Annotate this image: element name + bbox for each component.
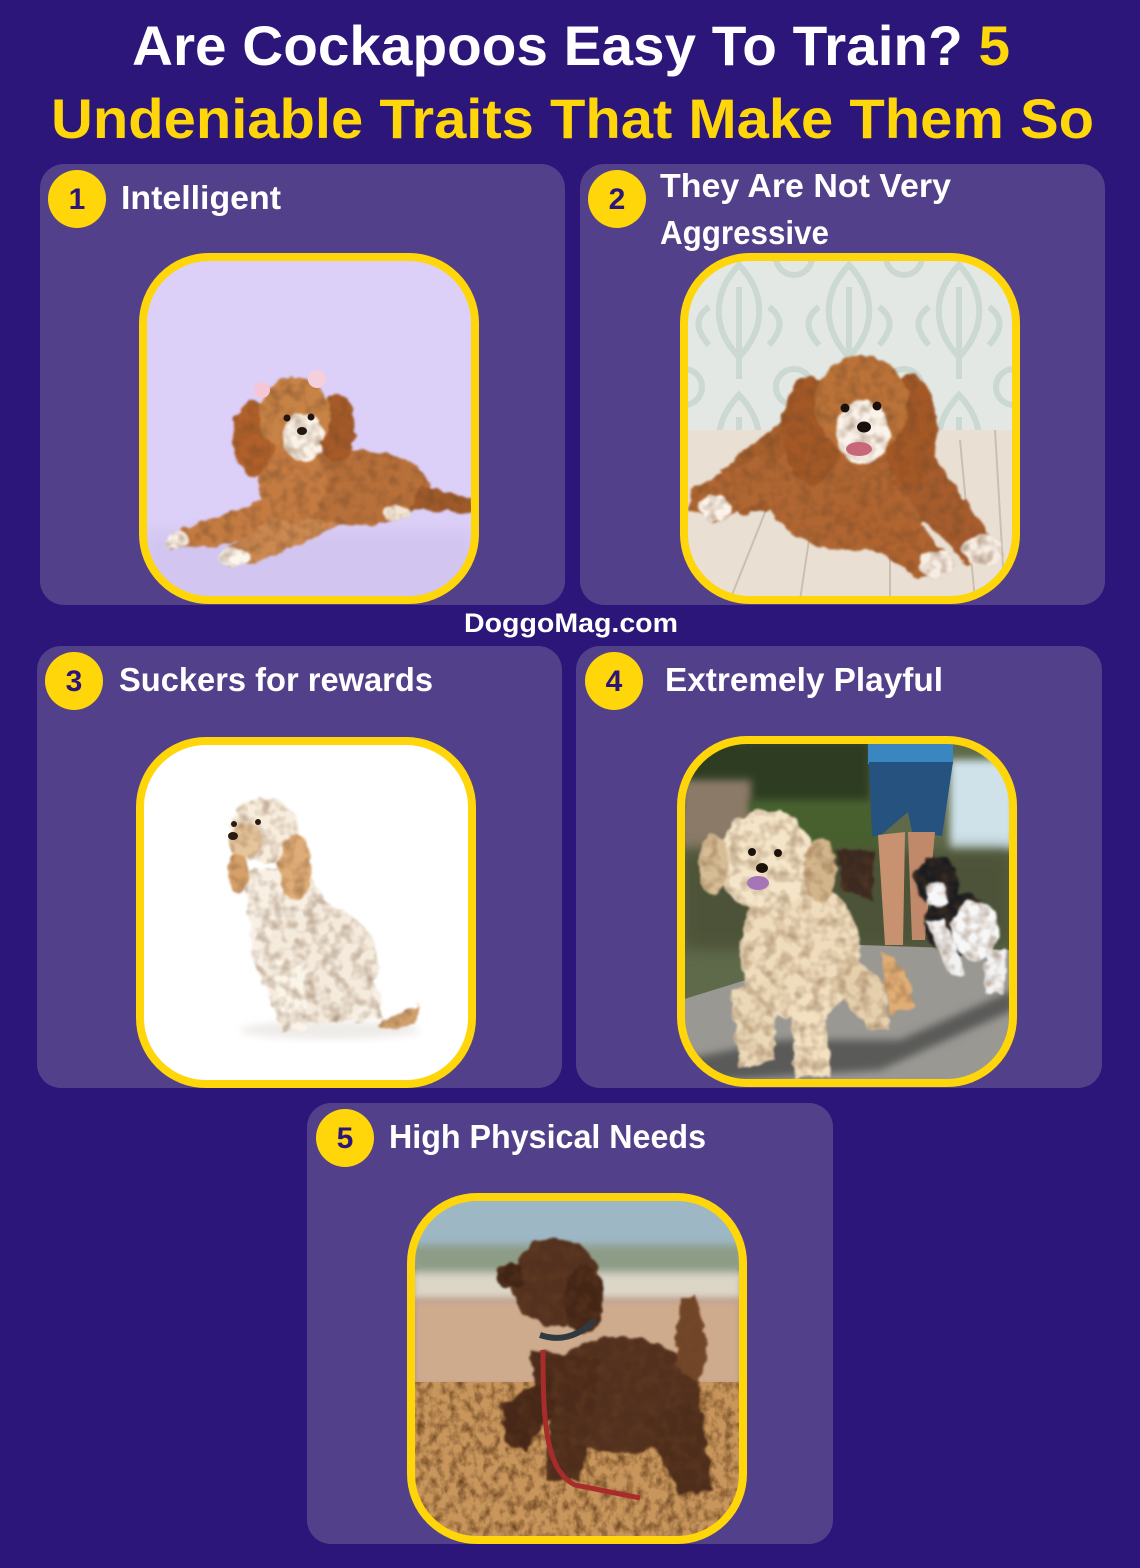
heading 2: Aggressive — [660, 214, 829, 251]
watermark: DoggoMag.com: DoggoMag.com — [464, 608, 678, 638]
badge 4: 4 — [606, 665, 623, 698]
heading 2 — [660, 167, 952, 251]
photo: red cockapoo on wooden floor — [684, 257, 1016, 600]
panel: 4 Extremely Playful — [576, 646, 1102, 1088]
title — [51, 14, 1094, 150]
heading 3: Suckers for rewards — [119, 661, 433, 698]
badge 2 — [588, 170, 646, 228]
badge 1: 1 — [69, 183, 85, 216]
photo: brown cockapoo on the beach — [411, 1197, 743, 1540]
badge 4 — [585, 652, 643, 710]
badge 5: 5 — [337, 1122, 353, 1155]
title: Are Cockapoos Easy To Train? 5 — [132, 14, 1010, 77]
panel: 3 Suckers for rewards — [37, 646, 562, 1088]
badge 3: 3 — [66, 665, 82, 698]
title: Undeniable Traits That Make Them So — [51, 87, 1094, 150]
panel: 5 High Physical Needs — [307, 1103, 833, 1544]
heading 2: They Are Not Very — [660, 167, 952, 204]
panel: 2 Not aggressive — [580, 164, 1105, 605]
photo: cream cockapoo on white — [140, 741, 472, 1084]
badge 5 — [316, 1109, 374, 1167]
badge 2: 2 — [609, 183, 625, 216]
badge 1 — [48, 170, 106, 228]
heading 1: Intelligent — [121, 179, 281, 216]
photo: cream cockapoo on a walk — [681, 738, 1015, 1083]
heading 4: Extremely Playful — [665, 661, 943, 698]
heading 5: High Physical Needs — [389, 1118, 706, 1155]
badge 3 — [45, 652, 103, 710]
panel: 1 Intelligent — [40, 164, 565, 610]
photo: red cockapoo on lilac — [143, 257, 475, 610]
